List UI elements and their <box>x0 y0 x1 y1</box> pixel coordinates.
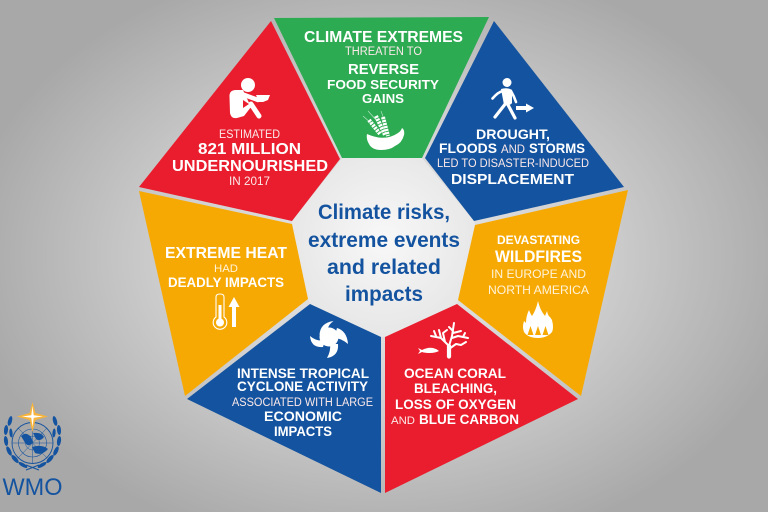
logo globe <box>12 422 53 464</box>
icon: wheat in bowl <box>363 111 404 150</box>
icon: seated person with bowl <box>229 78 270 118</box>
food security text: REVERSE <box>348 61 419 78</box>
icon: forest fire <box>523 301 553 338</box>
centre title: and related <box>327 256 441 279</box>
undernourished text <box>172 129 328 188</box>
logo: WMO <box>2 402 62 501</box>
panel: tropical cyclone <box>187 304 381 493</box>
displacement text: LED TO DISASTER-INDUCED <box>437 158 589 170</box>
cyclone text: INTENSE TROPICAL <box>237 366 369 381</box>
displacement text: AND <box>501 144 525 156</box>
centre title: impacts <box>345 283 423 306</box>
panel: extreme heat <box>139 191 308 396</box>
cyclone text: ECONOMIC <box>264 409 342 424</box>
centre title: Climate risks, <box>318 201 450 224</box>
cyclone text: ASSOCIATED WITH LARGE <box>232 397 373 409</box>
food security text: CLIMATE EXTREMES <box>304 29 463 46</box>
panel: wildfires <box>458 190 628 396</box>
food security text: GAINS <box>362 91 404 106</box>
displacement text: DISPLACEMENT <box>451 171 574 188</box>
extreme heat text: DEADLY IMPACTS <box>168 275 284 290</box>
ocean text: LOSS OF OXYGEN <box>395 397 516 412</box>
extreme heat text: EXTREME HEAT <box>165 245 288 262</box>
logo text: WMO <box>2 474 62 501</box>
wildfires text: NORTH AMERICA <box>488 283 589 297</box>
extreme heat text <box>165 245 288 290</box>
displacement text: DROUGHT, <box>476 126 550 142</box>
ocean text <box>391 366 519 427</box>
panel: displacement <box>425 21 624 221</box>
food security text <box>304 29 463 106</box>
food security text: THREATEN TO <box>345 46 422 58</box>
displacement text <box>437 126 589 188</box>
centre title: extreme events <box>308 229 460 252</box>
wildfires text: WILDFIRES <box>495 247 582 266</box>
panel: ocean coral <box>385 304 578 493</box>
ocean text: OCEAN CORAL <box>404 366 506 381</box>
ocean text: BLEACHING, <box>414 381 497 396</box>
undernourished text: UNDERNOURISHED <box>172 158 328 175</box>
logo star <box>17 402 48 432</box>
displacement text: STORMS <box>529 140 585 156</box>
icon: cyclone <box>310 321 348 358</box>
wildfires text: DEVASTATING <box>497 233 580 247</box>
panel: food security <box>274 17 489 158</box>
undernourished text: IN 2017 <box>229 176 270 188</box>
logo wreath <box>3 416 62 470</box>
cyclone text <box>232 366 373 439</box>
cyclone text: IMPACTS <box>274 424 332 439</box>
centre title <box>308 201 460 306</box>
extreme heat text: HAD <box>214 263 238 275</box>
ocean text: AND <box>391 415 415 427</box>
food security text: FOOD SECURITY <box>327 77 439 92</box>
wildfires text <box>488 233 589 297</box>
icon: coral <box>431 323 468 356</box>
wildfires text: IN EUROPE AND <box>491 267 586 281</box>
centre panel <box>292 158 475 337</box>
undernourished text: ESTIMATED <box>219 129 280 141</box>
cyclone text: CYCLONE ACTIVITY <box>237 379 368 394</box>
icon: fish <box>418 348 439 354</box>
icon: walking person with arrow <box>492 78 534 118</box>
displacement text: FLOODS <box>439 140 497 156</box>
icon: thermometer with arrow <box>213 294 240 329</box>
ocean text: BLUE CARBON <box>419 412 519 427</box>
undernourished text: 821 MILLION <box>198 141 301 158</box>
panel: undernourished <box>139 21 340 221</box>
